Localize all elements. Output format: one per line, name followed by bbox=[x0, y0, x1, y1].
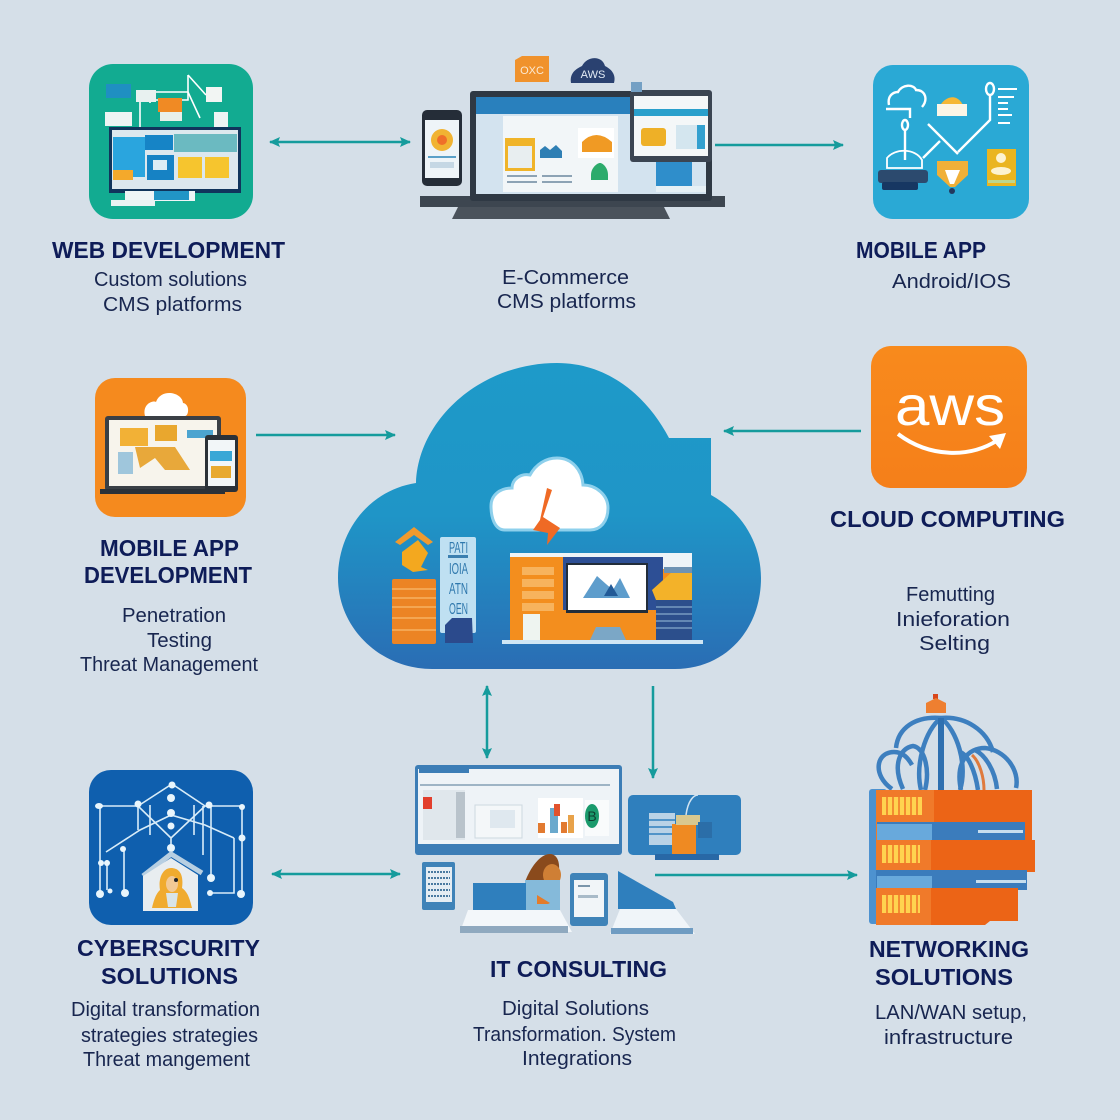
heading: it consulting: IT CONSULTING bbox=[490, 956, 667, 982]
arrow: web development to e-commerce bbox=[270, 141, 410, 143]
icon: angled laptop bbox=[610, 871, 695, 934]
text: cloud computing details bbox=[896, 584, 1010, 655]
heading: cybersecurity solutions: SOLUTIONS bbox=[101, 963, 238, 989]
heading: mobile app: MOBILE APP bbox=[856, 237, 986, 263]
icon: orange badge: OXC bbox=[520, 65, 544, 77]
panel: it consulting workstation illustration: B bbox=[587, 808, 597, 824]
text: cloud computing details: Selting bbox=[919, 633, 990, 655]
text: networking details bbox=[875, 1002, 1027, 1049]
icon: small tablet bbox=[422, 862, 455, 910]
arrow: cloud and it consulting two-way bbox=[486, 686, 488, 758]
text: it consulting details: Digital Solutions bbox=[502, 998, 649, 1020]
text: mobile app development details: Threat Management bbox=[80, 654, 258, 676]
heading: cybersecurity solutions bbox=[77, 935, 260, 989]
panel: it consulting workstation illustration bbox=[415, 765, 741, 934]
arrow: mobile app development to cloud bbox=[256, 434, 395, 436]
text: web development details: CMS platforms bbox=[103, 294, 242, 316]
text: web development details: Custom solutions bbox=[94, 269, 247, 291]
icon: navy cloud badge: AWS bbox=[581, 69, 605, 81]
panel: central cloud bbox=[338, 363, 761, 669]
heading: networking solutions bbox=[869, 936, 1029, 990]
text: cloud computing details: Femutting bbox=[906, 584, 995, 606]
icon: phone bbox=[570, 873, 608, 926]
heading: networking solutions: NETWORKING bbox=[869, 936, 1029, 962]
text: it consulting details: Transformation. System bbox=[473, 1024, 676, 1046]
heading: mobile app development: MOBILE APP bbox=[100, 535, 239, 561]
icon: white cloud with lightning bolt bbox=[491, 458, 608, 545]
text: networking details: LAN/WAN setup, bbox=[875, 1002, 1027, 1024]
arrow: e-commerce to mobile app bbox=[715, 144, 843, 146]
icon: navy cloud badge bbox=[571, 58, 615, 83]
icon: server rack: IOIA bbox=[449, 561, 468, 578]
icon: server rack: PATI bbox=[449, 540, 468, 557]
heading: networking solutions: SOLUTIONS bbox=[875, 964, 1013, 990]
icon: orange office building with monitor bbox=[502, 553, 703, 644]
panel: aws tile: aws bbox=[895, 374, 1005, 437]
text: mobile app development details bbox=[80, 605, 258, 676]
panel: mobile app development icon bbox=[95, 378, 246, 517]
text: cybersecurity details: Digital transformation bbox=[71, 999, 260, 1021]
text: mobile app details: Android/IOS bbox=[892, 271, 1011, 293]
arrow: cloud to it consulting bbox=[652, 686, 654, 778]
text: mobile app development details: Testing bbox=[147, 630, 212, 652]
text: web development details bbox=[94, 269, 247, 316]
text: networking details: infrastructure bbox=[884, 1027, 1013, 1049]
icon: server rack: ATN bbox=[449, 581, 468, 598]
heading: cloud computing: CLOUD COMPUTING bbox=[830, 506, 1065, 532]
text: it consulting details: Integrations bbox=[522, 1048, 632, 1070]
panel: web development icon bbox=[89, 64, 253, 219]
panel: cybersecurity icon bbox=[89, 770, 253, 925]
text: cybersecurity details: Threat mangement bbox=[83, 1049, 250, 1071]
text: cybersecurity details bbox=[71, 999, 260, 1071]
icon: server rack bbox=[440, 537, 476, 643]
text: cloud computing details: Inieforation bbox=[896, 609, 1010, 631]
arrow: cybersecurity and it consulting two-way bbox=[272, 873, 400, 875]
panel: aws tile bbox=[871, 346, 1027, 488]
text: cybersecurity details: strategies strategies bbox=[81, 1025, 258, 1047]
icon: orange database stack bbox=[392, 527, 436, 644]
arrow: it consulting to networking bbox=[655, 874, 857, 876]
panel: networking server stack bbox=[869, 694, 1035, 925]
heading: web development: WEB DEVELOPMENT bbox=[52, 237, 285, 263]
icon: blue monitor bbox=[628, 795, 741, 860]
text: it consulting details bbox=[473, 998, 676, 1070]
text: mobile app development details: Penetration bbox=[122, 605, 226, 627]
icon: person at laptop bbox=[460, 854, 572, 933]
icon: orange badge bbox=[515, 56, 549, 82]
icon: server rack: OEN bbox=[449, 601, 468, 618]
text: e-commerce details bbox=[497, 267, 636, 313]
icon: house with person bbox=[143, 854, 202, 911]
arrow: cloud computing to cloud bbox=[724, 430, 861, 432]
heading: mobile app development bbox=[84, 535, 252, 588]
panel: mobile app icon bbox=[873, 65, 1029, 219]
heading: mobile app development: DEVELOPMENT bbox=[84, 562, 252, 588]
heading: cybersecurity solutions: CYBERSCURITY bbox=[77, 935, 260, 961]
text: e-commerce details: CMS platforms bbox=[497, 291, 636, 313]
panel: e-commerce devices illustration bbox=[420, 56, 725, 219]
text: e-commerce details: E-Commerce bbox=[502, 267, 629, 289]
